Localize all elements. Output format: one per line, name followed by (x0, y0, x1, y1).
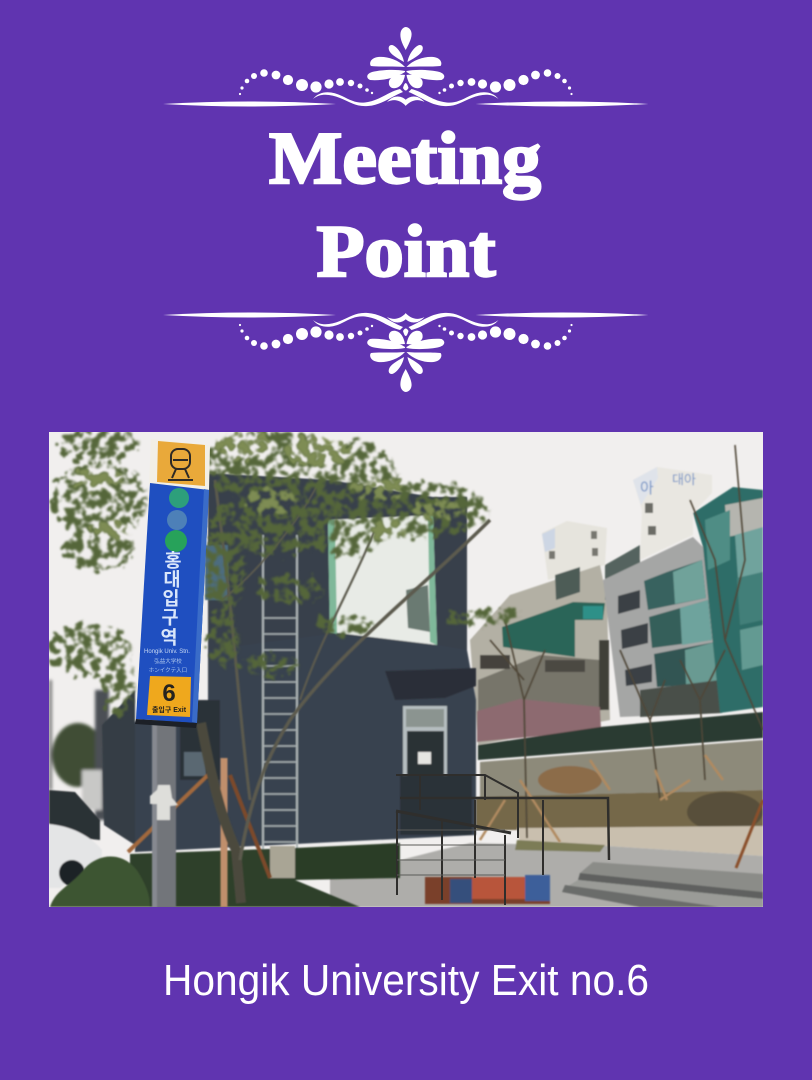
station name: 역 (160, 627, 178, 648)
exit number panel (147, 676, 191, 717)
lower left window (180, 700, 220, 780)
white tower left (542, 521, 607, 580)
tree foliage (48, 429, 522, 715)
building left wing (102, 690, 135, 845)
infographic page (49, 27, 763, 1004)
grass strip (515, 840, 605, 852)
station name: 대 (163, 569, 181, 590)
canopy (385, 668, 476, 700)
station name (160, 550, 182, 648)
background buildings (330, 467, 763, 907)
japanese and chinese station names: ホンイクテ入口 (149, 667, 187, 674)
station name: 구 (161, 607, 179, 628)
pink wall (477, 699, 601, 742)
title line 2: Point (316, 211, 496, 293)
line badges (165, 488, 189, 552)
stakes (128, 758, 270, 907)
middle apartment block (470, 545, 640, 745)
foliage highlight layer (76, 433, 466, 539)
white car (49, 824, 102, 888)
white tower right: 아 (640, 480, 654, 497)
sky (49, 432, 763, 907)
plaza (330, 843, 763, 907)
title (269, 118, 541, 293)
green glass building (693, 487, 763, 713)
top ornament (163, 27, 648, 106)
icon: subway train (168, 449, 193, 480)
steps (562, 862, 763, 907)
sign base (135, 719, 197, 728)
station name: 입 (162, 588, 180, 609)
parked cars (49, 790, 102, 888)
railings and bench (396, 775, 609, 905)
car wheel (59, 860, 85, 886)
english station name: Hongik Univ. Stn. (144, 649, 190, 655)
door (402, 704, 448, 776)
walking path (517, 826, 763, 856)
foliage base layer (48, 429, 522, 715)
wall ladder (263, 535, 297, 850)
bench (425, 875, 550, 904)
tree trunk, branches and stakes (128, 480, 490, 907)
hedges (50, 843, 400, 907)
background left buildings and trees (49, 680, 109, 820)
left upper window (205, 545, 228, 600)
sign blue body (136, 483, 209, 723)
dry shrub (686, 792, 763, 826)
sign head panel (149, 439, 210, 490)
caption: Hongik University Exit no.6 (163, 956, 649, 1005)
japanese and chinese station names (149, 657, 187, 674)
sign pole (150, 724, 178, 908)
bare saplings (480, 445, 763, 868)
station name: 홍 (164, 550, 182, 571)
trunk (201, 723, 241, 903)
door shadow (400, 775, 472, 835)
building lower block (135, 634, 476, 852)
orange shrub (538, 766, 602, 794)
orange station icon panel (157, 441, 205, 486)
grey striped building (603, 537, 722, 717)
upper window (328, 515, 437, 645)
photo: station exit sign and building (48, 429, 763, 908)
earth bank (476, 790, 763, 830)
dark main building (102, 473, 476, 852)
building upper tower (208, 473, 467, 660)
subway exit sign (135, 439, 210, 728)
white tower right: 대아 (672, 472, 696, 487)
bottom ornament (163, 312, 648, 392)
dark car (49, 790, 100, 840)
pole sticker (150, 785, 178, 820)
exit number: 6 (162, 680, 176, 707)
railings (396, 775, 609, 905)
japanese and chinese station names: 弘益大学校 (154, 657, 182, 665)
exit label: 출입구 Exit (152, 705, 187, 714)
title line 1: Meeting (269, 118, 541, 200)
hedge behind wall (478, 712, 763, 760)
stone retaining wall (480, 740, 763, 797)
white tower right (633, 467, 712, 560)
